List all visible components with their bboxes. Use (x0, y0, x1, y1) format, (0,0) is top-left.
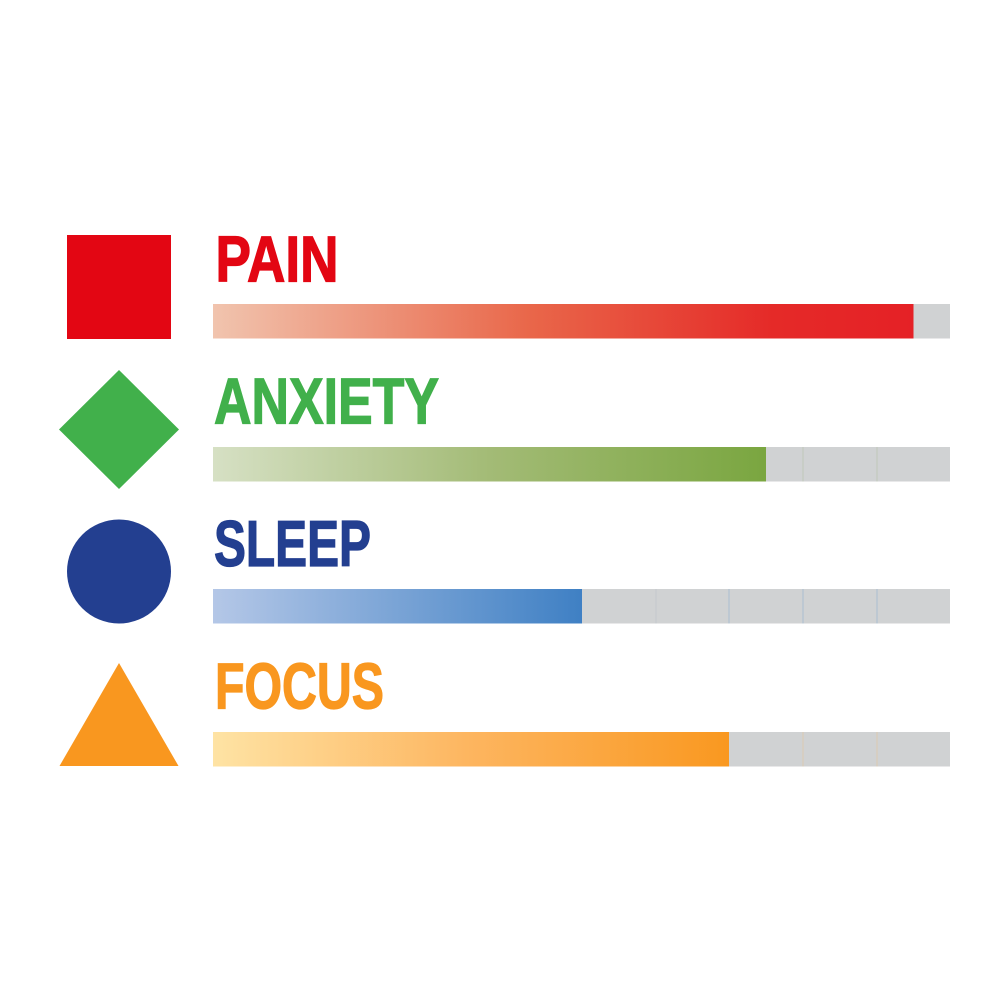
bar: pain (213, 304, 950, 338)
icon: orange triangle (60, 663, 178, 766)
row: focus (60, 650, 950, 766)
row: pain (67, 222, 950, 339)
bar: anxiety (213, 447, 950, 482)
bar: sleep (213, 589, 950, 624)
icon: green diamond (59, 370, 179, 489)
row: sleep (67, 507, 950, 624)
row: anxiety (59, 364, 950, 489)
heading: focus: FOCUS (215, 650, 384, 722)
heading: sleep: SLEEP (214, 507, 371, 580)
icon: red square (67, 235, 171, 339)
bar: focus (213, 732, 950, 766)
heading: pain: PAIN (216, 222, 338, 296)
heading: anxiety: ANXIETY (214, 364, 439, 438)
icon: blue circle (67, 520, 171, 624)
